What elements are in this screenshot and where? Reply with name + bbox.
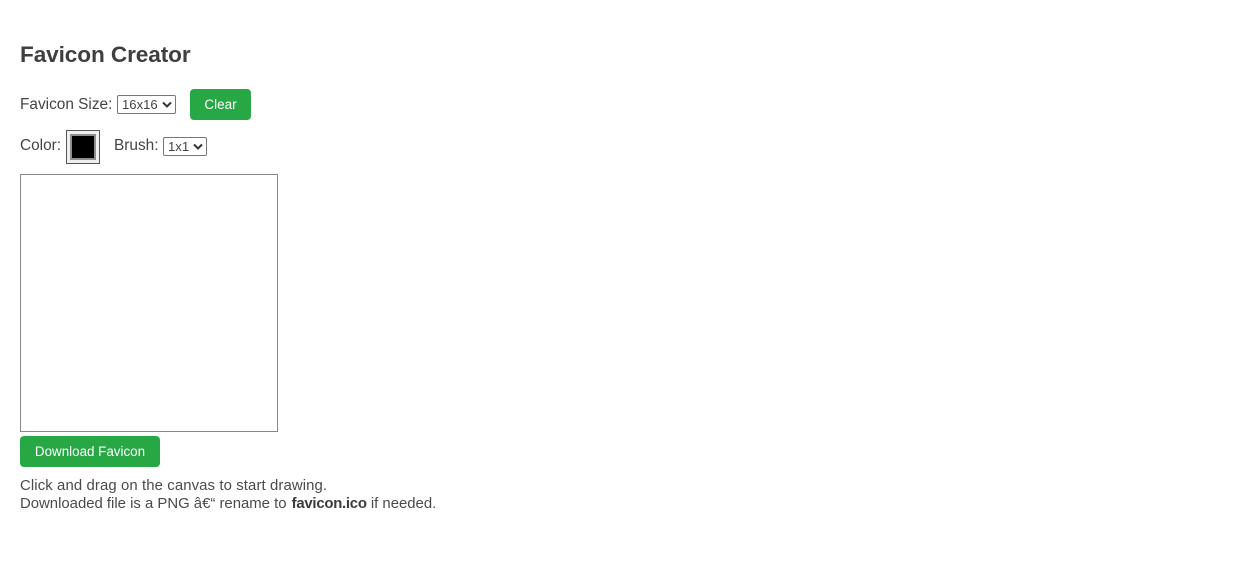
instructions text: Downloaded file is a PNG â€“ rename to favicon.ico if needed. [20, 496, 436, 512]
button: clear [190, 89, 251, 120]
label: favicon size: Favicon Size: [20, 96, 112, 113]
label: color: Color: [20, 137, 61, 154]
instructions text: Click and drag on the canvas to start drawing. [20, 478, 327, 494]
label: brush: Brush: [114, 137, 158, 154]
dropdown: brush [163, 137, 207, 156]
dropdown: brush: 1x1 [168, 139, 189, 154]
title: Favicon Creator [20, 42, 191, 67]
instructions text [20, 478, 436, 512]
dropdown: favicon size: 16x16 [122, 97, 158, 112]
dropdown: favicon size [117, 95, 176, 114]
button: download favicon: Download Favicon [35, 444, 145, 459]
color swatch [66, 130, 100, 164]
button: download favicon [20, 436, 160, 467]
button: clear: Clear [204, 97, 237, 112]
drawing canvas [20, 174, 278, 432]
